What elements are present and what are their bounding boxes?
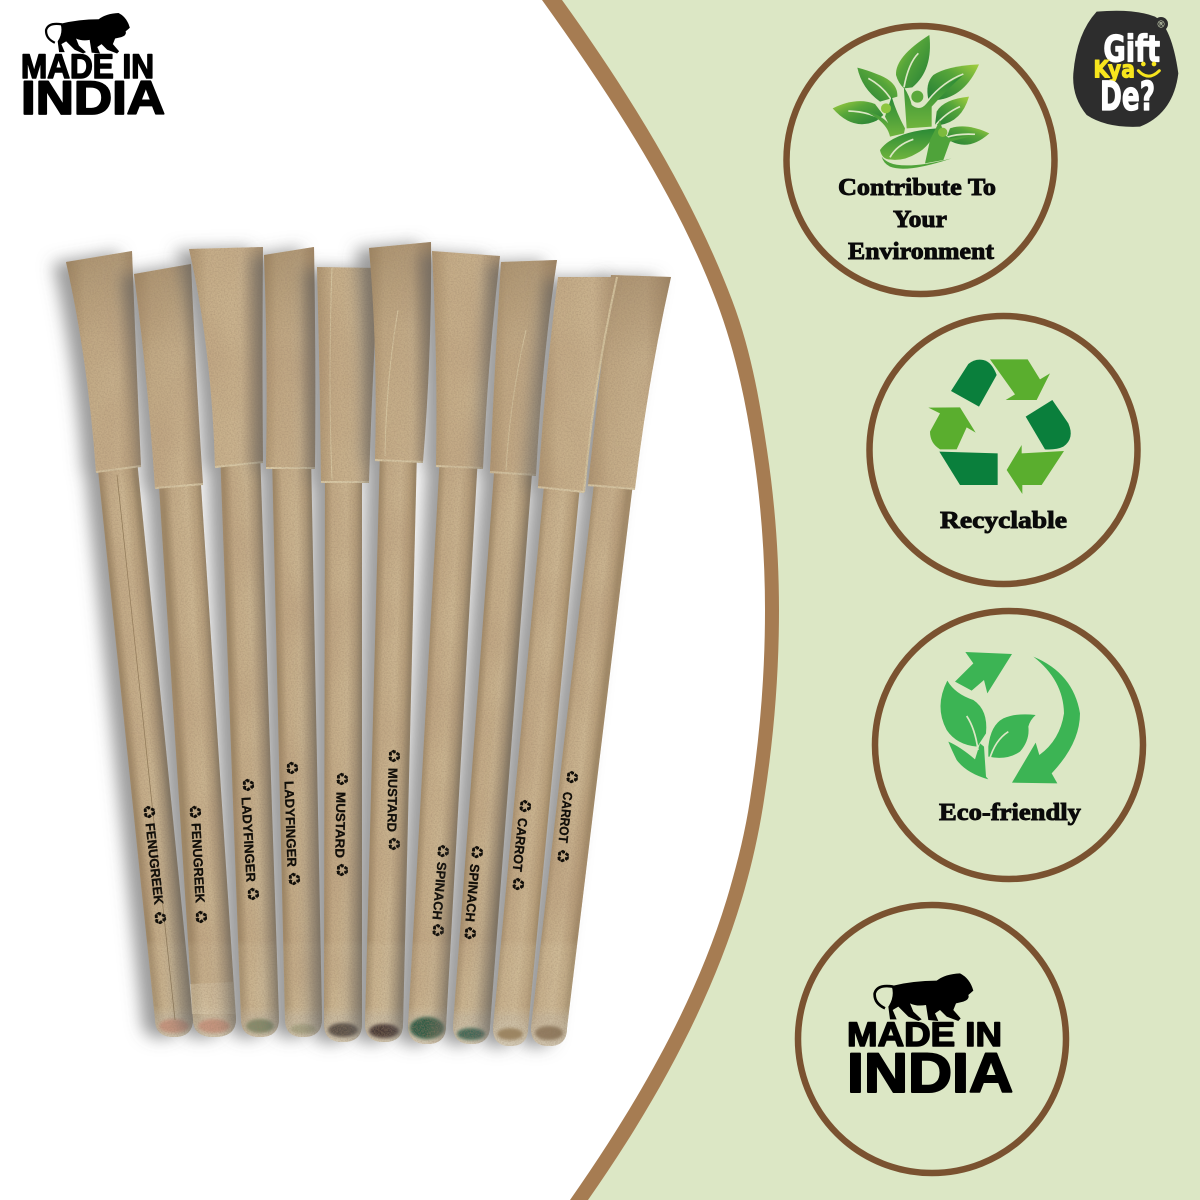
icon: lion: [875, 973, 973, 1021]
pen: ladyfinger 2: [264, 247, 322, 1037]
pen label: mustard 1: [331, 771, 351, 878]
pen label: mustard 1: ♻: [331, 771, 351, 787]
pen label: carrot 1: ♻: [513, 797, 535, 815]
text: your: Your: [893, 207, 947, 233]
icon: recycle arrows: [928, 359, 1071, 494]
icon: leaf with circular arrows: [940, 652, 1080, 783]
pen label: fenugreek 1: ♻: [137, 803, 159, 821]
pen label: fenugreek 1: [137, 803, 170, 927]
panel: contribute to your environment badge: [786, 26, 1054, 294]
pen: ladyfinger 1: [189, 247, 279, 1037]
pen label: ladyfinger 1: ♻: [242, 886, 262, 902]
icon: leaves and people: [833, 35, 989, 169]
pen label: ladyfinger 1: [237, 777, 262, 902]
pen label: carrot 1: CARROT: [510, 817, 530, 873]
pen label: spinach 1: ♻: [426, 922, 448, 938]
pen label: ladyfinger 2: ♻: [281, 760, 301, 776]
pen: fenugreek 1: [66, 251, 193, 1037]
pen label: fenugreek 1: FENUGREEK: [143, 822, 167, 906]
pen label: ladyfinger 1: ♻: [237, 777, 257, 793]
pen label: spinach 1: ♻: [431, 843, 453, 859]
pen: spinach 1: [408, 251, 500, 1044]
brand logo: gift kya de: Kya: [1093, 55, 1135, 83]
text: made in: MADE IN: [21, 48, 154, 86]
pen label: fenugreek 2: ♻: [184, 804, 204, 820]
pen label: carrot 1: [506, 797, 535, 893]
pen label: mustard 2: MUSTARD: [384, 768, 400, 832]
pen label: fenugreek 2: [184, 804, 210, 925]
pen label: spinach 2: [458, 844, 487, 941]
pen label: carrot 2: CARROT: [556, 791, 575, 844]
pen: carrot 1: [493, 277, 617, 1046]
pen label: mustard 1: MUSTARD: [332, 792, 348, 858]
pen label: spinach 1: [426, 843, 453, 938]
icon: lion: [46, 13, 130, 53]
pen label: carrot 1: ♻: [506, 875, 528, 893]
text: eco-friendly: Eco-friendly: [939, 800, 1081, 826]
pen label: spinach 2: ♻: [458, 925, 480, 941]
pen: mustard 1: [317, 267, 379, 1042]
pen label: mustard 1: ♻: [331, 862, 351, 878]
made in india logo top left: [21, 13, 165, 124]
text: made in: MADE IN: [847, 1016, 1002, 1054]
pen label: carrot 2: [551, 769, 582, 864]
text: contribute to: Contribute To: [838, 175, 996, 201]
pen label: spinach 1: SPINACH: [429, 861, 449, 920]
text: india: INDIA: [21, 71, 165, 124]
panel: eco-friendly badge: [875, 611, 1143, 879]
pen: spinach 2: [453, 260, 557, 1044]
pen: fenugreek 2: [134, 264, 236, 1037]
brand logo: gift kya de: Gift: [1103, 28, 1160, 71]
pen label: mustard 2: ♻: [383, 836, 403, 852]
brown arc edge: [542, 0, 779, 1200]
pen label: ladyfinger 2: [281, 760, 303, 887]
pen label: ladyfinger 2: LADYFINGER: [282, 781, 300, 868]
pen label: fenugreek 2: FENUGREEK: [189, 823, 208, 904]
panel: recyclable badge: [870, 316, 1138, 584]
pen label: spinach 2: SPINACH: [462, 863, 482, 922]
pen: carrot 2: [531, 275, 671, 1046]
pen: mustard 2: [365, 242, 431, 1042]
pen label: mustard 2: [383, 748, 403, 852]
pen label: mustard 2: ♻: [383, 748, 403, 764]
panel: made in india badge: [798, 905, 1066, 1173]
pen label: ladyfinger 1: LADYFINGER: [239, 797, 259, 883]
pen label: ladyfinger 2: ♻: [283, 871, 303, 887]
text: india: INDIA: [847, 1041, 1013, 1104]
pen label: carrot 2: ♻: [560, 769, 582, 785]
pen label: spinach 2: ♻: [465, 844, 487, 860]
text: environment: Environment: [848, 239, 994, 265]
brand logo: gift kya de: ®: [1156, 19, 1166, 30]
text: recyclable: Recyclable: [940, 508, 1067, 534]
photo: row of seed paper pens: [66, 242, 671, 1046]
pen label: fenugreek 1: ♻: [148, 909, 170, 927]
pen label: carrot 2: ♻: [551, 848, 573, 864]
pen label: fenugreek 2: ♻: [190, 909, 210, 925]
white curved photo panel: [0, 0, 772, 1200]
brand logo: gift kya de: De?: [1100, 74, 1155, 120]
brand logo: gift kya de: [1073, 11, 1178, 127]
